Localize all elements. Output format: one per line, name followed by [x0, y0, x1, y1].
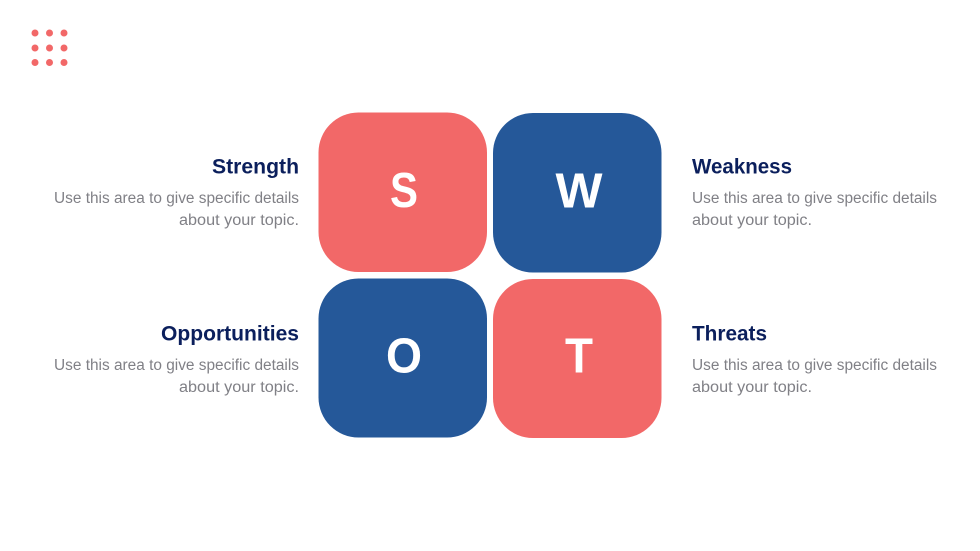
description: strength: Use this area to give specific details: [54, 190, 299, 207]
description: threats: Use this area to give specific details: [692, 357, 937, 374]
panel: strength tile: [318, 112, 487, 272]
heading: opportunities: Opportunities: [161, 322, 299, 346]
description: opportunities: Use this area to give specific details: [54, 357, 299, 374]
text block: weakness: [692, 156, 937, 229]
panel: threats tile: [493, 279, 662, 438]
description: threats: [692, 357, 937, 396]
heading: strength: Strength: [212, 156, 299, 178]
description: strength: [54, 190, 299, 229]
panel: weakness tile: [493, 113, 662, 272]
heading: threats: Threats: [692, 322, 767, 346]
letter W: W: [556, 164, 603, 218]
panel: opportunities tile: [318, 278, 487, 438]
text block: strength: [54, 156, 299, 229]
description: opportunities: about your topic.: [179, 379, 299, 396]
description: weakness: Use this area to give specific details: [692, 190, 937, 207]
description: strength: about your topic.: [179, 212, 299, 229]
letter T: T: [565, 330, 593, 384]
description: opportunities: [54, 357, 299, 396]
text block: opportunities: [54, 322, 299, 396]
description: weakness: [692, 190, 937, 229]
description: threats: about your topic.: [692, 379, 812, 396]
letter S: S: [390, 164, 418, 218]
letter O: O: [386, 330, 422, 384]
description: weakness: about your topic.: [692, 212, 812, 229]
decorative dot grid: [32, 30, 68, 66]
text block: threats: [692, 322, 937, 396]
heading: weakness: Weakness: [692, 156, 792, 178]
